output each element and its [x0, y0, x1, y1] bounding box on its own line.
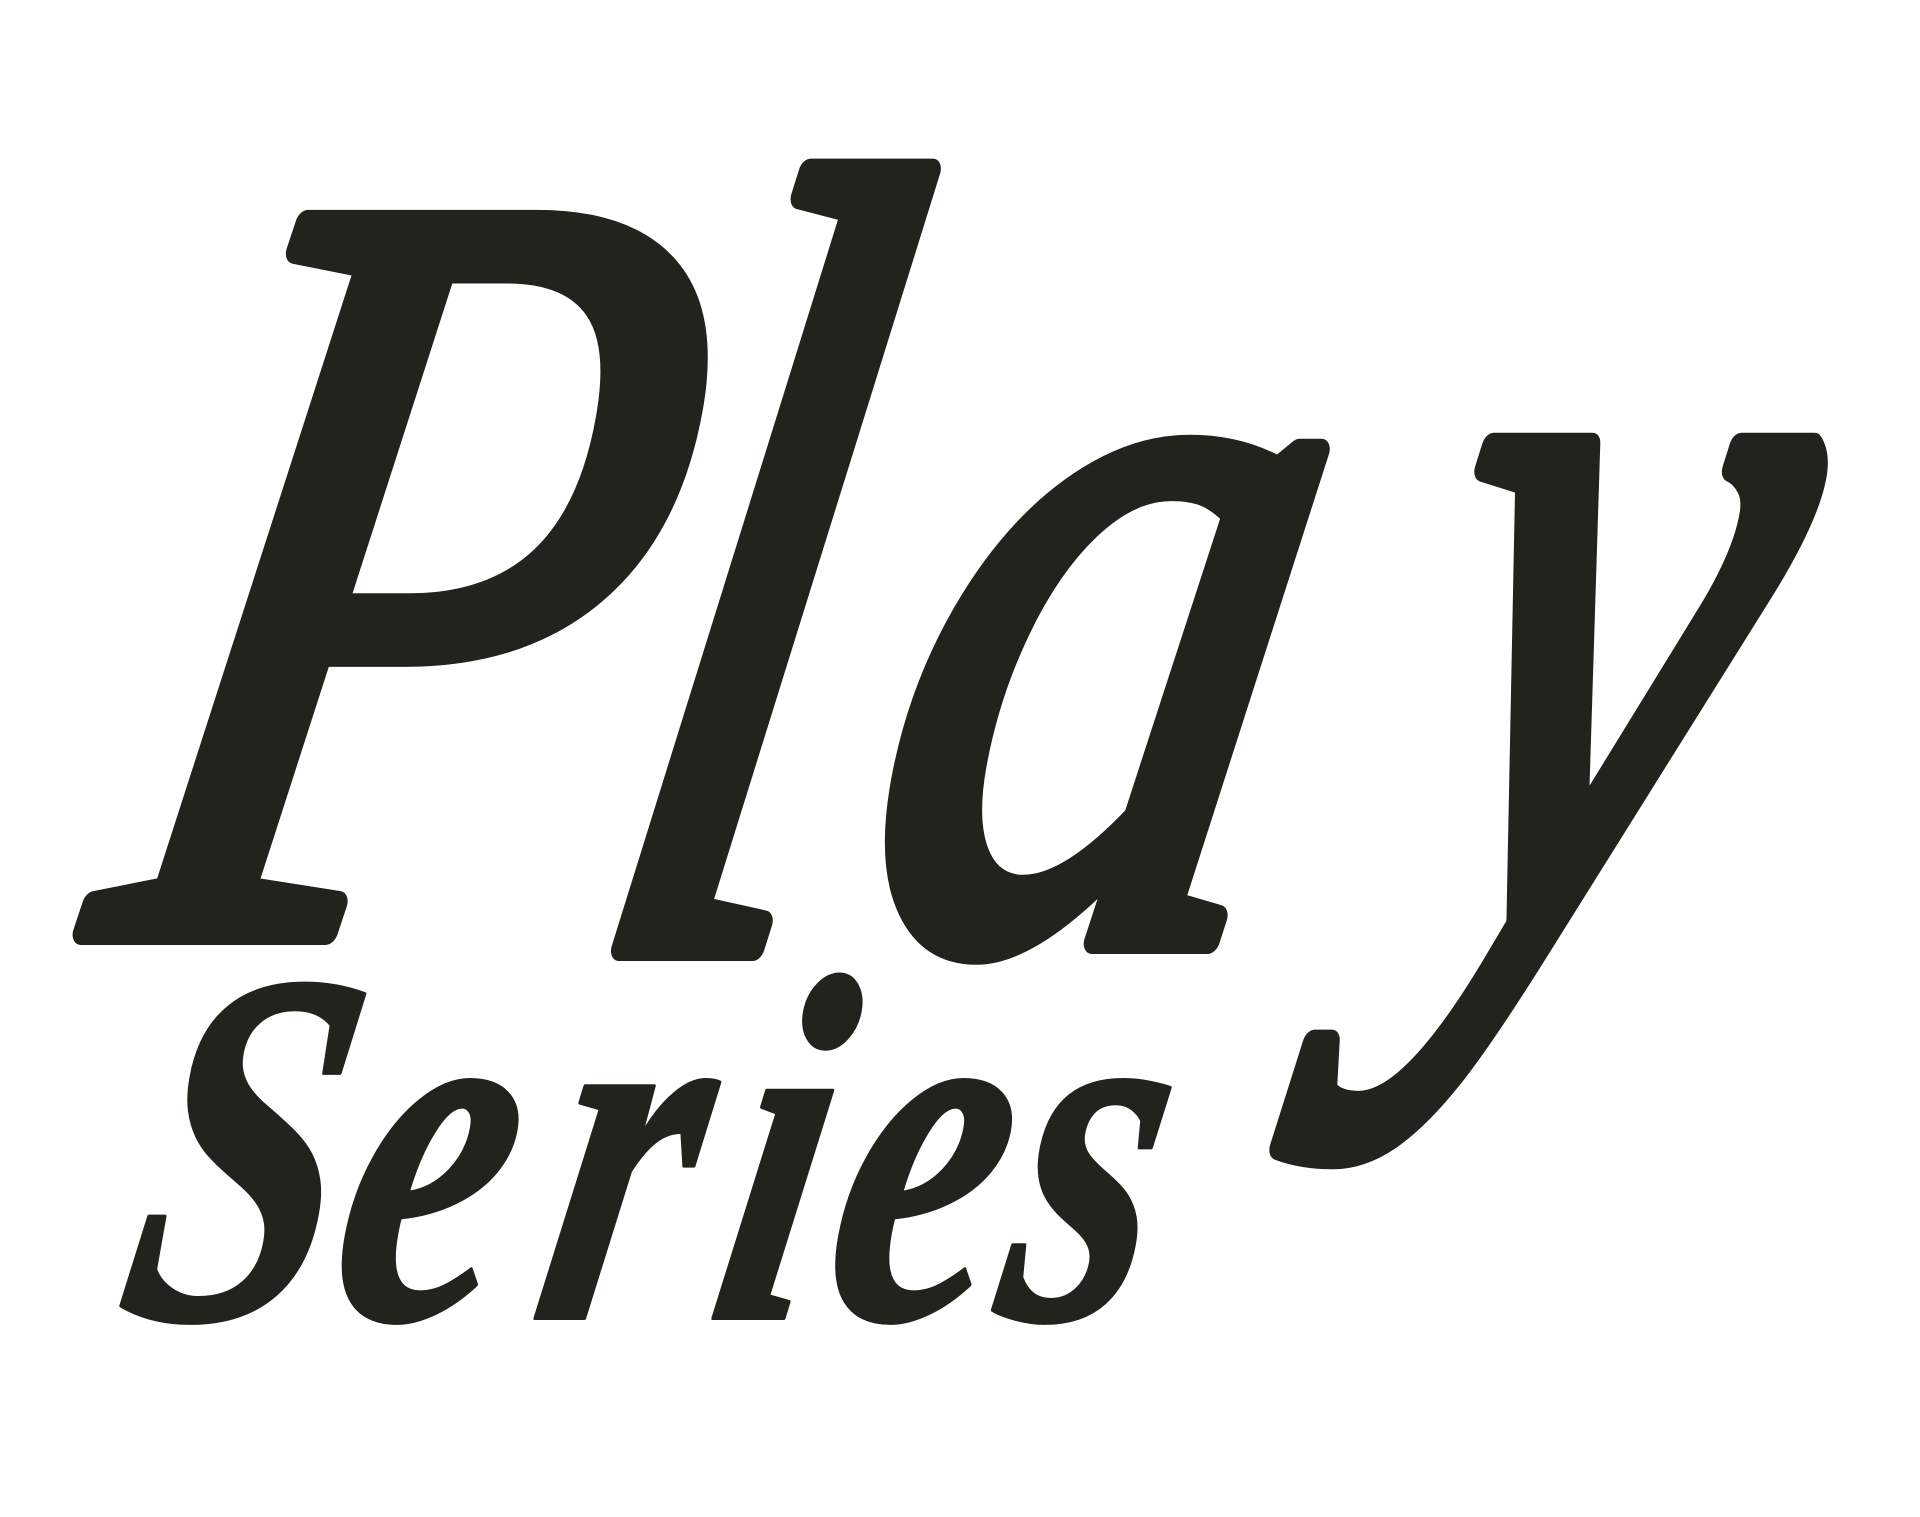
word: Series: S [92, 868, 403, 1428]
word: Play: a [807, 8, 1430, 1168]
word: Series: e [303, 868, 572, 1428]
word: Series: s [967, 868, 1221, 1428]
word: Play: y [1269, 0, 1911, 1159]
word: Series: i [684, 877, 887, 1426]
word: Series: r [507, 868, 762, 1428]
word: Series: e [796, 868, 1065, 1428]
word: Play: P [32, 0, 794, 1167]
